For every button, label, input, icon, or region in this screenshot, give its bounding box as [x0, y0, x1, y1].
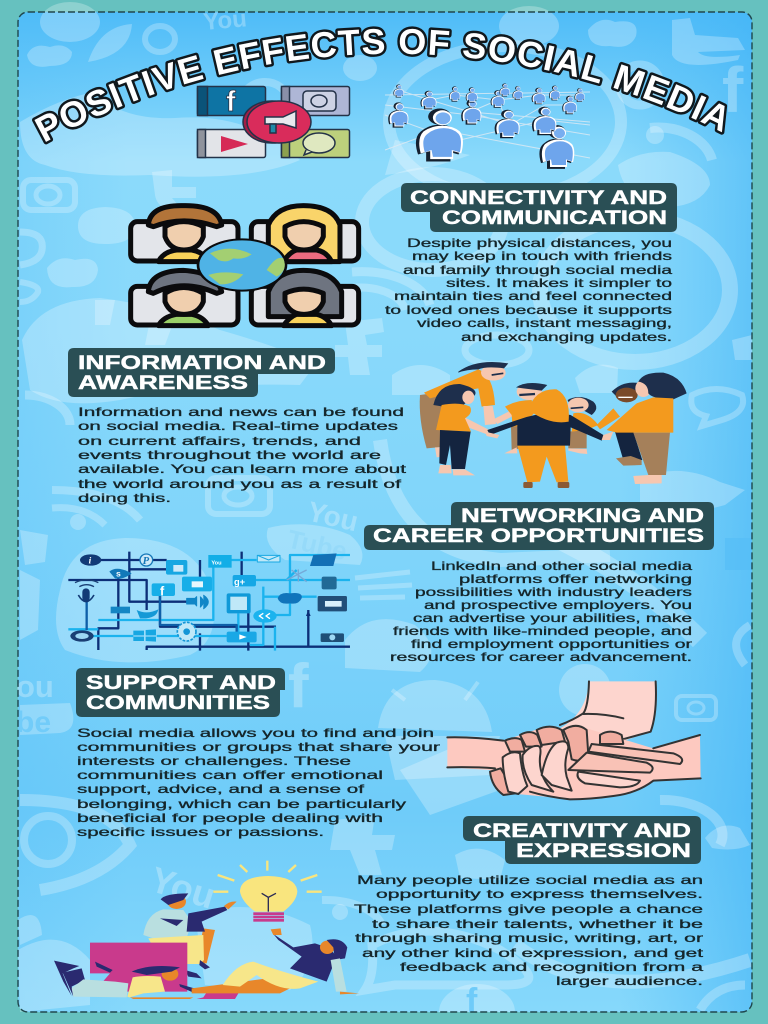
- text: creativity: [354, 873, 704, 988]
- ghost social media icons: f: [288, 652, 309, 721]
- icon: whatsapp card: [282, 130, 350, 158]
- text: information: the world around you as a result of: [78, 477, 402, 491]
- icon nodes: f: [160, 585, 165, 599]
- heading: networking: [364, 502, 714, 550]
- icon: light bulb: [213, 861, 322, 922]
- text: networking: friends with like-minded people, and: [393, 624, 692, 638]
- text: connectivity: video calls, instant messaging,: [417, 316, 672, 330]
- text: support: communities or groups that share your: [77, 740, 440, 754]
- connector lines: [68, 552, 350, 651]
- text: information: on social media. Real-time updates: [78, 419, 398, 433]
- text: creativity: opportunity to express themselves.: [376, 887, 703, 901]
- text: networking: platforms offer networking: [459, 572, 692, 586]
- icon: instagram card: [282, 86, 350, 116]
- text: support: support, advice, and a sense of: [77, 782, 365, 796]
- text: networking: possibilities with industry leaders: [415, 585, 692, 599]
- illustration: group joining hands: [420, 362, 687, 488]
- text: networking: [390, 559, 693, 664]
- ghost social media icons: f: [722, 54, 744, 126]
- figure: seated man: [143, 893, 237, 978]
- heading: information: [68, 348, 335, 397]
- text: support: specific issues or passions.: [77, 825, 324, 839]
- text: support: communities can offer emotional: [77, 768, 383, 782]
- text: information: on current affairs, trends, and: [78, 434, 361, 448]
- ghost social media icons: You: [305, 496, 361, 537]
- text: connectivity: sites. It makes it simpler to: [446, 276, 673, 290]
- heading: creativity: [463, 816, 701, 864]
- top hand: [560, 681, 656, 742]
- knuckle fingers: [505, 738, 525, 752]
- icon nodes: i: [89, 556, 92, 566]
- icon: facebook card: f: [226, 86, 236, 118]
- illustration: people sharing a bright idea: [54, 861, 359, 999]
- heading: information: AWARENESS: [78, 372, 248, 394]
- figure: woman right: [607, 373, 687, 484]
- text: information: events throughout the world are: [78, 448, 382, 462]
- text: support: beneficial for people dealing with: [77, 811, 383, 825]
- figure: man right: [597, 383, 642, 466]
- heading: networking: NETWORKING AND: [461, 505, 704, 527]
- text: connectivity: and exchanging updates.: [461, 330, 672, 344]
- text: networking: LinkedIn and other social media: [431, 559, 693, 573]
- text: networking: resources for career advancement.: [390, 650, 692, 664]
- heading: connectivity: [401, 183, 677, 232]
- icon nodes: P: [143, 556, 150, 567]
- text: information: [78, 405, 407, 505]
- text: support: belonging, which can be particularly: [77, 797, 406, 811]
- heading: creativity: CREATIVITY AND: [473, 820, 691, 842]
- card: top right: [251, 206, 359, 262]
- icon: video card: [198, 130, 266, 158]
- icon: globe: [197, 238, 287, 292]
- text: creativity: larger audience.: [556, 974, 703, 988]
- text: networking: find employment opportunities or: [411, 637, 692, 651]
- figure: girl left: [433, 384, 489, 475]
- ghost social media icons: Tube: [285, 524, 350, 566]
- figure: tall woman: [420, 362, 508, 457]
- card: bottom right: [251, 270, 359, 326]
- text: connectivity: [385, 236, 673, 344]
- text: creativity: feedback and recognition from a: [400, 960, 704, 974]
- icon: four video-call avatars with globe: [131, 206, 359, 326]
- title: POSITIVE EFFECTS OF SOCIAL MEDIA: [32, 26, 728, 144]
- ghost social media icons: f: [466, 982, 478, 1020]
- icon: megaphone badge: [243, 101, 311, 143]
- figure: man back: [493, 383, 547, 453]
- text: support: Social media allows you to find and join: [77, 726, 434, 740]
- text: networking: can advertise your abilities, make: [413, 611, 693, 625]
- text: support: [77, 726, 440, 839]
- icon nodes: You: [211, 561, 222, 567]
- text: networking: and prospective employers. You: [424, 598, 692, 612]
- icon: people network: [385, 84, 590, 169]
- heading: support: SUPPORT AND: [86, 672, 276, 694]
- text: connectivity: Despite physical distances, you: [407, 236, 672, 250]
- speech bubble: [90, 943, 187, 992]
- card: top left: [131, 206, 238, 262]
- heading: information: INFORMATION AND: [78, 352, 326, 374]
- text: creativity: any other kind of expression, and get: [362, 946, 704, 960]
- text: creativity: Many people utilize social media as an: [357, 873, 703, 887]
- ghost social media icons: ou: [16, 669, 54, 704]
- text: support: interests or challenges. These: [77, 754, 352, 768]
- icon nodes: g+: [234, 577, 246, 587]
- figure: girl back right: [568, 397, 598, 454]
- figure: centre hijab: [485, 389, 613, 488]
- ghost social media icons: be: [16, 706, 51, 739]
- text: connectivity: and family through social media: [403, 263, 673, 277]
- text: creativity: These platforms give people a chance: [354, 902, 704, 916]
- figure: leaning woman: [192, 928, 359, 994]
- text: connectivity: may keep in touch with friends: [412, 249, 672, 263]
- icon: social media cards with megaphone: [198, 86, 350, 158]
- icon: facebook card: [198, 86, 266, 118]
- chart: network of connected social icons: [68, 552, 350, 651]
- extended fingers: [588, 744, 682, 764]
- text: connectivity: maintain ties and feel connected: [394, 289, 672, 303]
- text: information: Information and news can be found: [78, 405, 404, 419]
- heading: creativity: EXPRESSION: [516, 840, 691, 862]
- text: information: doing this.: [78, 491, 171, 505]
- ghost social media icons: You: [202, 5, 248, 36]
- text: connectivity: to loved ones because it supports: [385, 303, 672, 317]
- text: creativity: to share their talents, whether it be: [372, 917, 704, 931]
- heading: support: [76, 668, 285, 717]
- heading: connectivity: COMMUNICATION: [442, 207, 667, 229]
- text: creativity: through sharing music, writing, art, or: [355, 931, 703, 945]
- palm and front fingers: [490, 768, 516, 795]
- icon nodes: s: [116, 569, 121, 579]
- heading: support: COMMUNITIES: [86, 692, 270, 714]
- text: information: available. You can learn more about: [78, 462, 407, 476]
- figure: lying woman: [54, 961, 200, 999]
- icon nodes: [70, 553, 347, 642]
- hands base: [447, 728, 701, 799]
- heading: connectivity: CONNECTIVITY AND: [410, 187, 667, 209]
- card: bottom left: [131, 270, 238, 326]
- icon: laptop: [197, 987, 242, 999]
- ghost social media icons: You: [146, 858, 220, 917]
- heading: networking: CAREER OPPORTUNITIES: [373, 525, 704, 547]
- illustration: caring hands: [447, 681, 701, 799]
